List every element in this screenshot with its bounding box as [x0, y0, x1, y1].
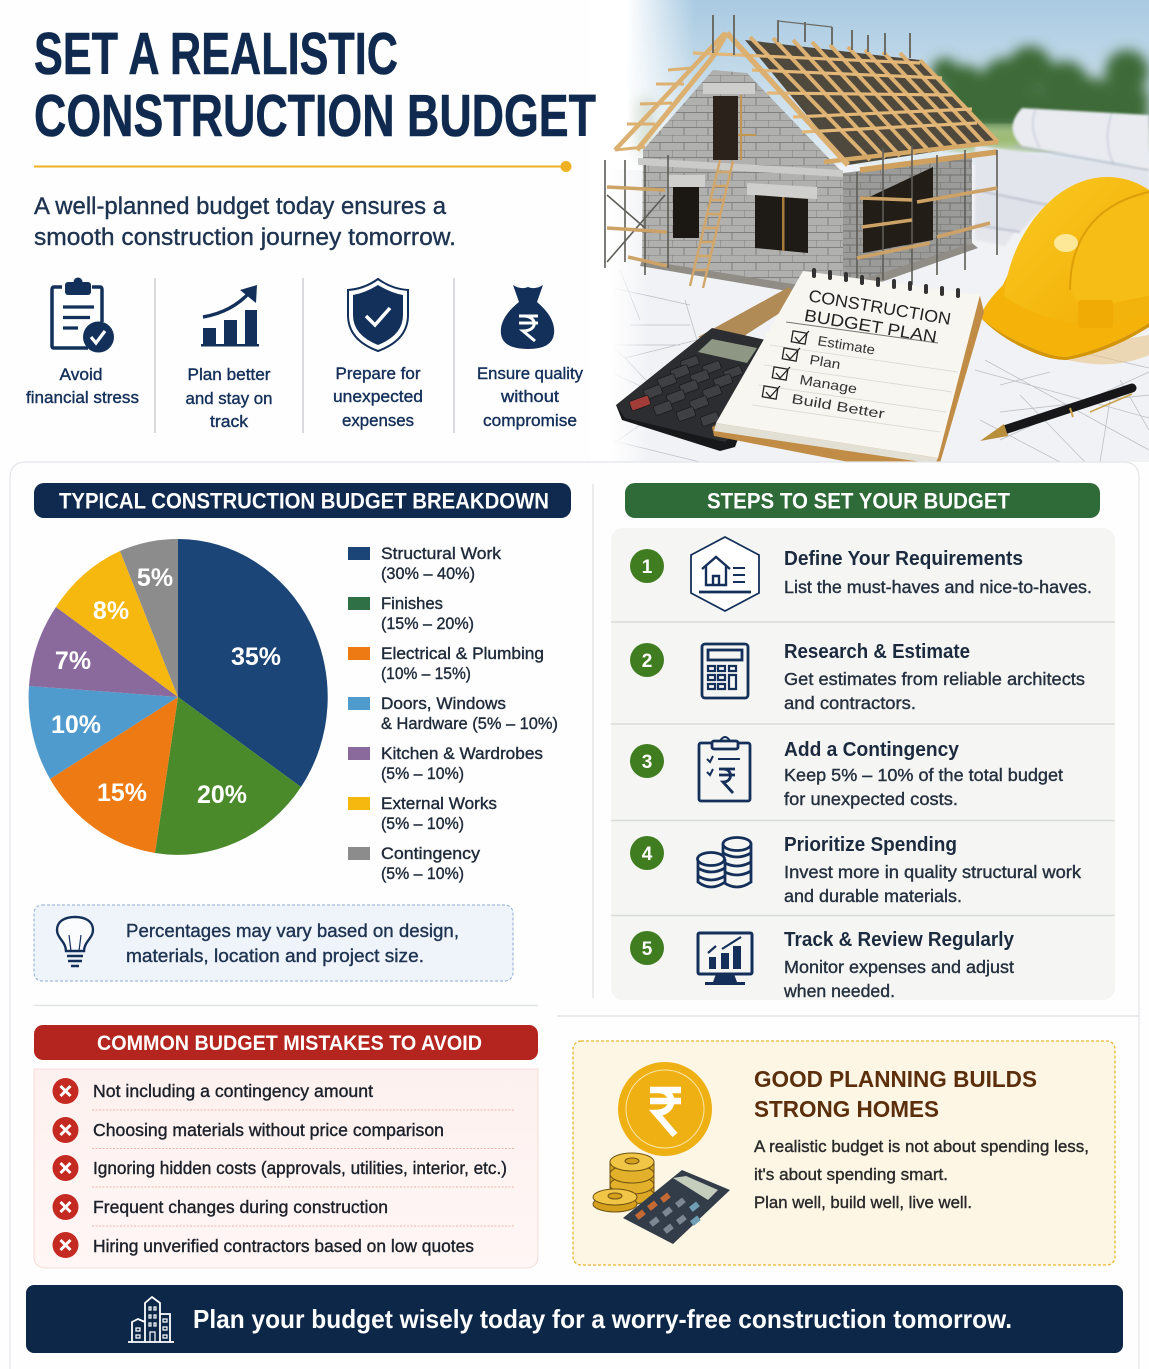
notebook: construction budget plan: Plan — [809, 352, 842, 372]
benefit: avoid financial stress: Avoid — [60, 366, 102, 384]
heading: typical construction budget breakdown — [34, 483, 571, 518]
benefit: plan better — [186, 285, 272, 431]
notebook: construction budget plan: Estimate — [817, 333, 876, 358]
benefit: ensure quality — [477, 285, 584, 430]
benefit: plan better: track — [210, 413, 249, 431]
heading: mistakes: COMMON BUDGET MISTAKES TO AVOID — [97, 1032, 482, 1055]
step 1 — [630, 537, 1092, 611]
mistake 5: Hiring unverified contractors based on low quotes — [93, 1236, 474, 1256]
pie chart: 15% — [97, 779, 147, 807]
step 4 — [630, 834, 1081, 906]
legend: Electrical & Plumbing — [381, 645, 544, 663]
icon: clipboard with rupee — [699, 737, 750, 801]
benefit: prepare for unexpected — [333, 279, 423, 430]
step 4: and durable materials. — [784, 886, 962, 906]
icon: monitor with chart — [698, 933, 752, 985]
legend: (15% – 20%) — [381, 615, 474, 633]
pie chart: 10% — [51, 711, 101, 739]
benefit: prepare for unexpected: expenses — [342, 412, 414, 430]
title rule — [34, 161, 572, 172]
title: SET A REALISTIC — [34, 21, 398, 87]
hard hat — [980, 177, 1149, 364]
step 3: for unexpected costs. — [784, 789, 958, 809]
benefit: ensure quality: Ensure quality — [477, 365, 584, 383]
step 3: Add a Contingency — [784, 739, 960, 761]
legend: Kitchen & Wardrobes — [381, 745, 543, 763]
benefit: avoid financial stress: financial stress — [26, 389, 139, 407]
heading: steps — [625, 483, 1100, 518]
legend: (5% – 10%) — [381, 765, 464, 783]
subtitle — [34, 193, 456, 251]
icon: light bulb — [57, 917, 93, 966]
mistake 4: Frequent changes during construction — [93, 1197, 388, 1217]
panel: good planning builds strong homes — [573, 1041, 1115, 1265]
pie chart: 35% — [231, 643, 281, 671]
hero illustration: house under construction with budget plan — [590, 0, 1149, 470]
step 4: 4 — [642, 844, 653, 865]
heading: typical construction budget breakdown: TYPICAL CONSTRUCTION BUDGET BREAKDOWN — [59, 488, 549, 514]
heading: mistakes — [34, 1025, 538, 1060]
benefit: ensure quality: compromise — [483, 412, 577, 430]
notebook: construction budget plan: BUDGET PLAN — [803, 306, 938, 347]
legend: Structural Work — [381, 545, 502, 563]
panel: budget breakdown — [29, 483, 571, 981]
footer banner: Plan your budget wisely today for a worry-free construction tomorrow. — [193, 1304, 1012, 1334]
mistake 1 — [52, 1078, 373, 1104]
panel: good planning builds strong homes: Plan well, build well, live well. — [754, 1193, 972, 1212]
pie chart: 7% — [55, 647, 91, 675]
benefit: plan better: Plan better — [188, 366, 271, 384]
step 2: Research & Estimate — [784, 641, 970, 663]
icon: coin stack — [593, 1153, 654, 1212]
panel: main white card — [10, 462, 1139, 1369]
benefit: prepare for unexpected: Prepare for — [336, 365, 421, 383]
legend: (10% – 15%) — [381, 665, 471, 683]
pie chart: 8% — [93, 597, 129, 625]
callout: percentages note: materials, location and project size. — [126, 945, 424, 966]
step 3: 3 — [642, 752, 652, 773]
pie chart: 5% — [137, 564, 173, 592]
mistake 1: Not including a contingency amount — [93, 1081, 373, 1101]
step 3: Keep 5% – 10% of the total budget — [784, 765, 1063, 785]
mistake 5 — [52, 1232, 474, 1258]
icon: calculator — [702, 644, 748, 698]
notebook: construction budget plan: Build Better — [791, 391, 886, 422]
footer banner — [26, 1285, 1123, 1353]
step 5: when needed. — [783, 981, 895, 1001]
pie chart: 20% — [197, 781, 247, 809]
step 4: Prioritize Spending — [784, 834, 957, 856]
callout: percentages note: Percentages may vary based on design, — [126, 920, 459, 941]
pen — [980, 388, 1132, 441]
step 2 — [630, 641, 1085, 713]
panel: good planning builds strong homes: it's about spending smart. — [754, 1165, 948, 1184]
step 2: and contractors. — [784, 693, 916, 713]
notebook: construction budget plan — [712, 268, 984, 470]
blueprint paper — [590, 165, 1149, 462]
title — [34, 21, 596, 149]
benefit: plan better: and stay on — [186, 390, 272, 408]
step 5: 5 — [642, 939, 653, 960]
legend: External Works — [381, 795, 497, 813]
benefit: ensure quality: without — [500, 388, 559, 406]
subtitle: A well-planned budget today ensures a — [34, 193, 447, 220]
scaffolding and ladder — [605, 145, 997, 288]
calculator — [616, 287, 800, 451]
mistake 4 — [52, 1194, 388, 1220]
legend: (30% – 40%) — [381, 565, 475, 583]
panel: good planning builds strong homes: A realistic budget is not about spending less, — [754, 1137, 1089, 1156]
panel: good planning builds strong homes: GOOD PLANNING BUILDS — [754, 1066, 1037, 1092]
step 5: Monitor expenses and adjust — [784, 957, 1014, 977]
panel: steps to set your budget — [611, 483, 1115, 1001]
icon: coin stacks — [698, 838, 751, 887]
legend: Contingency — [381, 845, 481, 863]
icon: rupee coin — [618, 1062, 712, 1156]
notebook: construction budget plan: Manage — [799, 372, 858, 397]
icon: house in hexagon — [691, 537, 759, 611]
step 5 — [630, 929, 1015, 1001]
mistake 2: Choosing materials without price comparison — [93, 1120, 444, 1140]
legend: Finishes — [381, 595, 443, 613]
roof rafters — [615, 15, 998, 170]
benefits row — [26, 278, 584, 433]
pie chart — [29, 539, 328, 855]
legend: (5% – 10%) — [381, 815, 464, 833]
step 3 — [630, 737, 1063, 809]
benefit: avoid financial stress — [26, 278, 139, 407]
house — [638, 70, 978, 293]
step 2: 2 — [642, 651, 652, 672]
mistake 2 — [52, 1117, 444, 1143]
step 1: Define Your Requirements — [784, 548, 1023, 570]
panel: common budget mistakes — [34, 1025, 538, 1268]
heading: steps: STEPS TO SET YOUR BUDGET — [707, 488, 1011, 514]
icon: calculator — [623, 1170, 730, 1244]
step 2: Get estimates from reliable architects — [784, 669, 1085, 689]
legend: & Hardware (5% – 10%) — [381, 715, 558, 733]
step 5: Track & Review Regularly — [784, 929, 1015, 951]
legend: Doors, Windows — [381, 695, 506, 713]
legend — [348, 545, 558, 883]
mistake 3: Ignoring hidden costs (approvals, utilities, interior, etc.) — [93, 1158, 507, 1178]
callout: percentages note — [34, 905, 513, 981]
step 1: 1 — [642, 557, 653, 578]
icon: building — [128, 1297, 174, 1342]
step 1: List the must-haves and nice-to-haves. — [784, 577, 1092, 597]
benefit: prepare for unexpected: unexpected — [333, 388, 423, 406]
notebook: construction budget plan: CONSTRUCTION — [807, 286, 952, 329]
blueprint rolls — [975, 108, 1149, 246]
title: CONSTRUCTION BUDGET — [34, 83, 596, 149]
panel: good planning builds strong homes: STRONG HOMES — [754, 1096, 939, 1122]
mistake 3 — [52, 1155, 507, 1181]
legend: (5% – 10%) — [381, 865, 464, 883]
step 4: Invest more in quality structural work — [784, 862, 1081, 882]
subtitle: smooth construction journey tomorrow. — [34, 224, 456, 251]
